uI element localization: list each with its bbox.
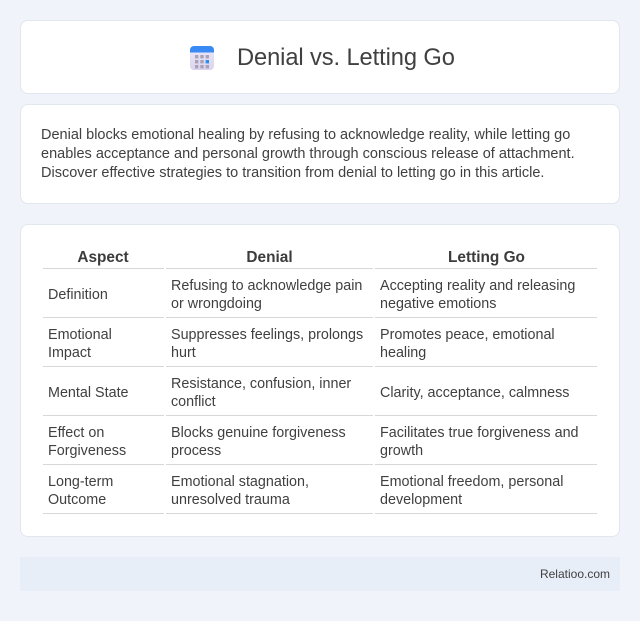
row: definition	[43, 278, 597, 318]
row: emotional impact: Promotes peace, emotional	[380, 327, 555, 343]
row: long-term outcome	[43, 474, 597, 514]
row: long-term outcome: Emotional freedom, personal	[380, 474, 563, 490]
row: mental state: Clarity, acceptance, calmness	[380, 385, 569, 401]
row: effect on forgiveness: Forgiveness	[48, 443, 126, 459]
intro panel	[20, 104, 620, 204]
row: emotional impact: Emotional	[48, 327, 112, 343]
row: mental state	[43, 376, 597, 416]
row: effect on forgiveness: growth	[380, 443, 423, 459]
row: effect on forgiveness: process	[171, 443, 221, 459]
table header	[43, 249, 597, 269]
table header: Denial	[246, 249, 293, 266]
intro text: Discover effective strategies to transition from denial to letting go in this article.	[41, 165, 544, 181]
row: long-term outcome: Long-term	[48, 474, 113, 490]
row: long-term outcome: unresolved trauma	[171, 492, 290, 508]
intro text	[41, 127, 575, 181]
row: long-term outcome: Emotional stagnation,	[171, 474, 309, 490]
row: effect on forgiveness: Blocks genuine forgiveness	[171, 425, 346, 441]
row: effect on forgiveness	[43, 425, 597, 465]
row: effect on forgiveness: Effect on	[48, 425, 104, 441]
row: mental state: conflict	[171, 394, 216, 410]
row: effect on forgiveness: Facilitates true forgiveness and	[380, 425, 579, 441]
footer bar	[20, 557, 620, 591]
header panel	[20, 20, 620, 94]
row: definition: or wrongdoing	[171, 296, 262, 312]
table panel	[20, 224, 620, 537]
title: Denial vs. Letting Go	[237, 45, 455, 71]
row: definition: negative emotions	[380, 296, 496, 312]
row: mental state: Resistance, confusion, inner	[171, 376, 351, 392]
row: emotional impact	[43, 327, 597, 367]
row: emotional impact: hurt	[171, 345, 196, 361]
row: definition: Accepting reality and releasing	[380, 278, 575, 294]
row: definition: Definition	[48, 287, 108, 303]
table header: Aspect	[77, 249, 129, 266]
intro text: enables acceptance and personal growth through conscious release of attachment.	[41, 146, 575, 162]
footer text: Relatioo.com	[540, 567, 610, 581]
icon: calendar	[190, 46, 214, 70]
row: definition: Refusing to acknowledge pain	[171, 278, 362, 294]
row: emotional impact: Impact	[48, 345, 91, 361]
row: mental state: Mental State	[48, 385, 129, 401]
row: long-term outcome: development	[380, 492, 462, 508]
row: emotional impact: Suppresses feelings, prolongs	[171, 327, 363, 343]
table header: Letting Go	[448, 249, 525, 266]
row: long-term outcome: Outcome	[48, 492, 106, 508]
intro text: Denial blocks emotional healing by refusing to acknowledge reality, while letting go	[41, 127, 570, 143]
row: emotional impact: healing	[380, 345, 426, 361]
